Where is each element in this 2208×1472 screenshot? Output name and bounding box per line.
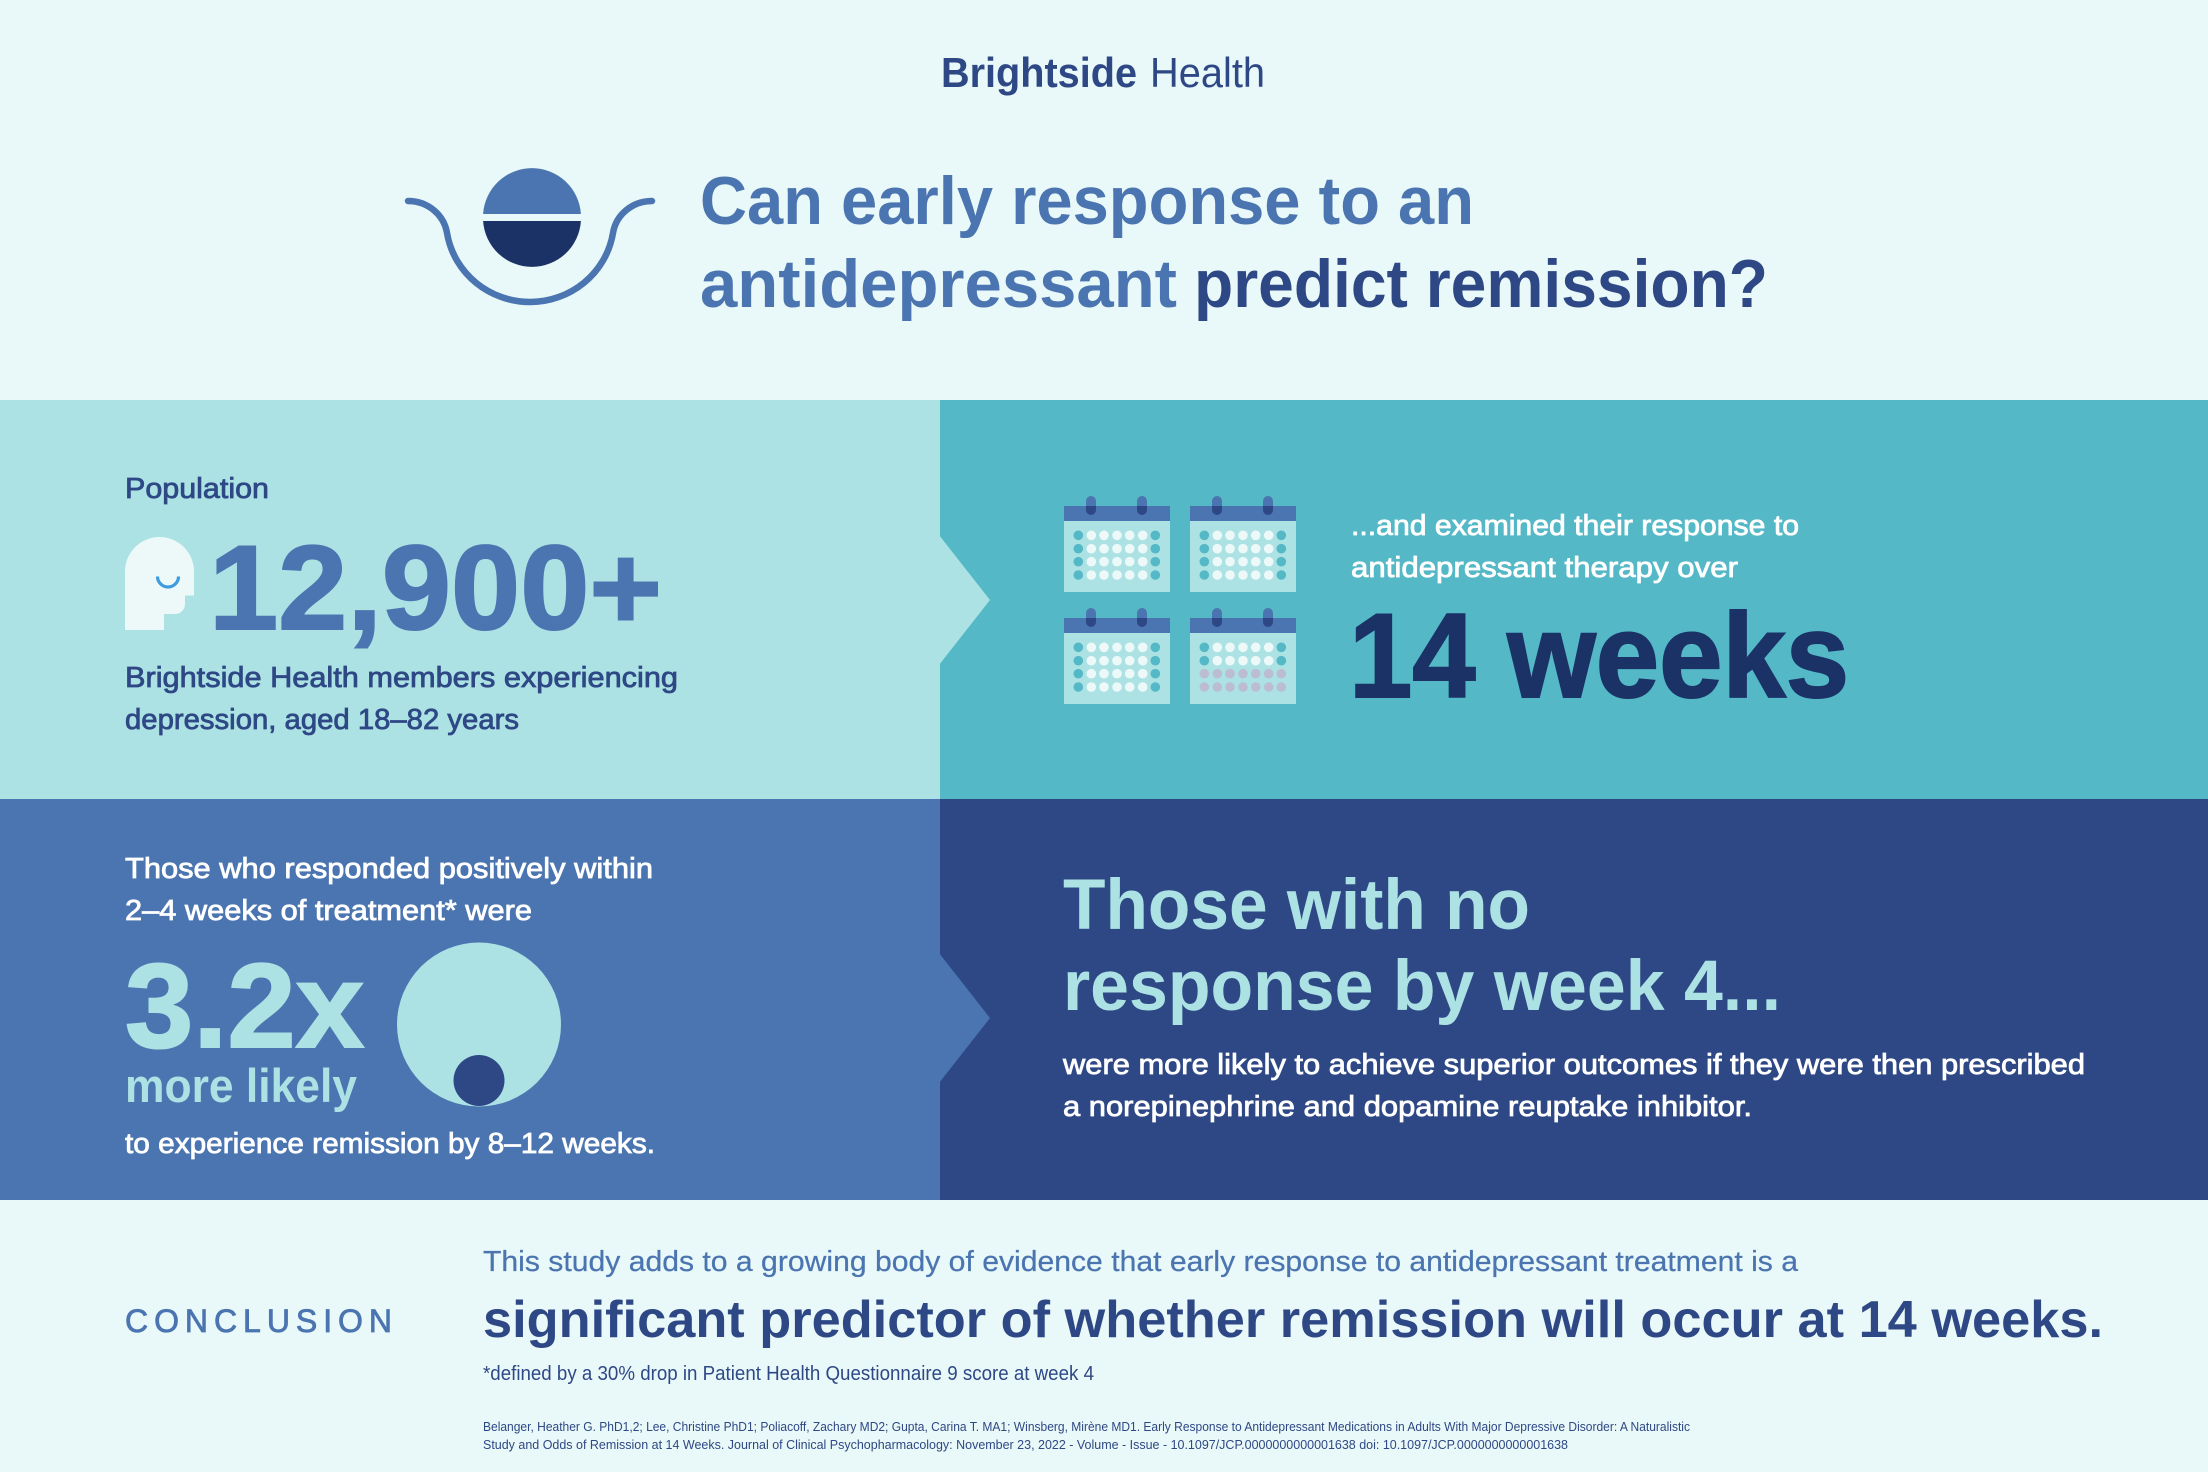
conclusion text: significant predictor of whether remission will occur at 14 weeks.	[483, 1291, 2103, 1349]
logo: Brightside Health: Health	[1150, 49, 1265, 96]
title: predict remission?	[1194, 246, 1768, 322]
icon: four monthly calendars	[1064, 496, 1296, 704]
text: examined response: ...and examined their response to	[1351, 510, 1799, 542]
panel: no response by week 4	[940, 799, 2208, 1200]
label: Population: Population	[125, 473, 269, 505]
heading: conclusion: CONCLUSION	[125, 1303, 392, 1339]
conclusion text: This study adds to a growing body of evidence that early response to antidepressant treatment is a	[483, 1246, 1799, 1278]
text: members description: depression, aged 18–82 years	[125, 704, 519, 736]
icon: large circle with small circle	[397, 942, 561, 1106]
text: members description: Brightside Health members experiencing	[125, 662, 678, 694]
text: NDRI outcome: were more likely to achieve superior outcomes if they were then prescribed	[1062, 1049, 2085, 1081]
arrow: to timeframe	[939, 535, 990, 665]
text: examined response: antidepressant therapy over	[1351, 552, 1738, 584]
text: responders intro: Those who responded positively within	[125, 853, 653, 885]
text: responders intro	[125, 853, 653, 927]
panel: population	[0, 400, 990, 799]
text: responders intro: 2–4 weeks of treatment* were	[125, 895, 532, 927]
logo: Brightside Health	[941, 49, 1265, 96]
big number: 3.2x: 3.2x	[125, 939, 364, 1073]
title: Can early response to an	[700, 163, 1474, 239]
text: remission timing: to experience remission by 8–12 weeks.	[125, 1128, 655, 1160]
text: NDRI outcome	[1062, 1049, 2085, 1123]
text: examined response	[1351, 510, 1799, 584]
icon: head profile	[125, 537, 194, 630]
panel: 14 weeks timeframe	[940, 400, 2208, 799]
title: antidepressant	[700, 246, 1177, 322]
logo: Brightside Health: Brightside	[941, 49, 1137, 96]
text: members description	[125, 662, 678, 736]
references	[483, 1420, 1690, 1452]
icon: pill in a smiling curve	[408, 168, 652, 302]
footnote: *defined by a 30% drop in Patient Health Questionnaire 9 score at week 4	[483, 1363, 1094, 1385]
heading: those with no response: response by week 4...	[1063, 947, 1781, 1026]
label: more likely: more likely	[125, 1059, 357, 1112]
panel: early responders	[0, 799, 990, 1200]
references: Belanger, Heather G. PhD1,2; Lee, Christine PhD1; Poliacoff, Zachary MD2; Gupta, Carina T. MA1; Winsberg, Mirène MD1. Early Response to Antidepressant Medications in Adults With Major Depressive Disorder: A Naturalistic	[483, 1420, 1690, 1434]
title	[700, 163, 1768, 322]
text: NDRI outcome: a norepinephrine and dopamine reuptake inhibitor.	[1063, 1091, 1752, 1123]
big number: 12,900+: 12,900+	[209, 521, 662, 655]
heading: those with no response: Those with no	[1063, 866, 1530, 945]
arrow: to no response	[939, 953, 990, 1083]
references: Study and Odds of Remission at 14 Weeks. Journal of Clinical Psychopharmacology: November 23, 2022 - Volume - Issue - 10.1097/JCP.0000000000001638 doi: 10.1097/JCP.0000000000001638	[483, 1438, 1568, 1452]
big number: 14 weeks: 14 weeks	[1349, 589, 1849, 723]
heading: those with no response	[1063, 866, 1781, 1026]
conclusion text	[483, 1246, 2103, 1349]
